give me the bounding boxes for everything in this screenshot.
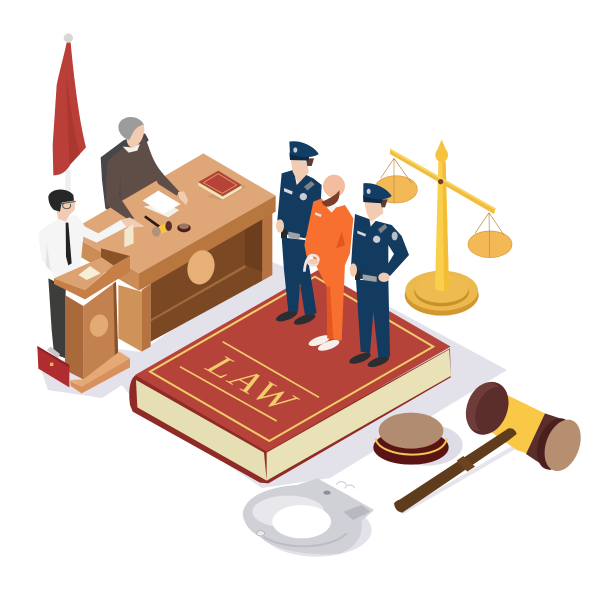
judge arms	[106, 155, 188, 221]
book cover spine	[129, 348, 451, 483]
right police officer	[348, 183, 409, 369]
papers on desk	[143, 191, 181, 217]
right pan	[468, 213, 512, 258]
book title: LAW	[195, 351, 309, 417]
law book group	[129, 270, 451, 483]
book pages	[136, 349, 451, 481]
gavel head	[459, 375, 587, 476]
figures group	[275, 141, 409, 369]
gavel handle	[394, 428, 517, 513]
courtroom group	[37, 33, 276, 393]
left police officer	[275, 141, 322, 327]
scale base	[405, 271, 479, 316]
handcuffs	[243, 478, 374, 557]
scale column	[435, 139, 449, 291]
gavel set group	[243, 375, 587, 557]
judge desk	[67, 153, 276, 352]
briefcase	[37, 346, 69, 387]
book cover	[135, 270, 451, 452]
podium	[54, 248, 130, 393]
scales	[375, 139, 512, 316]
small gavel	[144, 215, 191, 237]
sounding block	[373, 413, 463, 466]
clerk	[38, 190, 145, 358]
gavel shadow	[400, 445, 517, 514]
judge	[101, 117, 163, 212]
gold frame	[150, 277, 433, 441]
desk book	[198, 171, 247, 201]
left pan	[375, 158, 417, 203]
flag	[53, 33, 86, 193]
title band lines	[180, 342, 319, 421]
beam	[390, 148, 496, 214]
prisoner	[304, 175, 353, 353]
floor shadow	[42, 262, 507, 488]
